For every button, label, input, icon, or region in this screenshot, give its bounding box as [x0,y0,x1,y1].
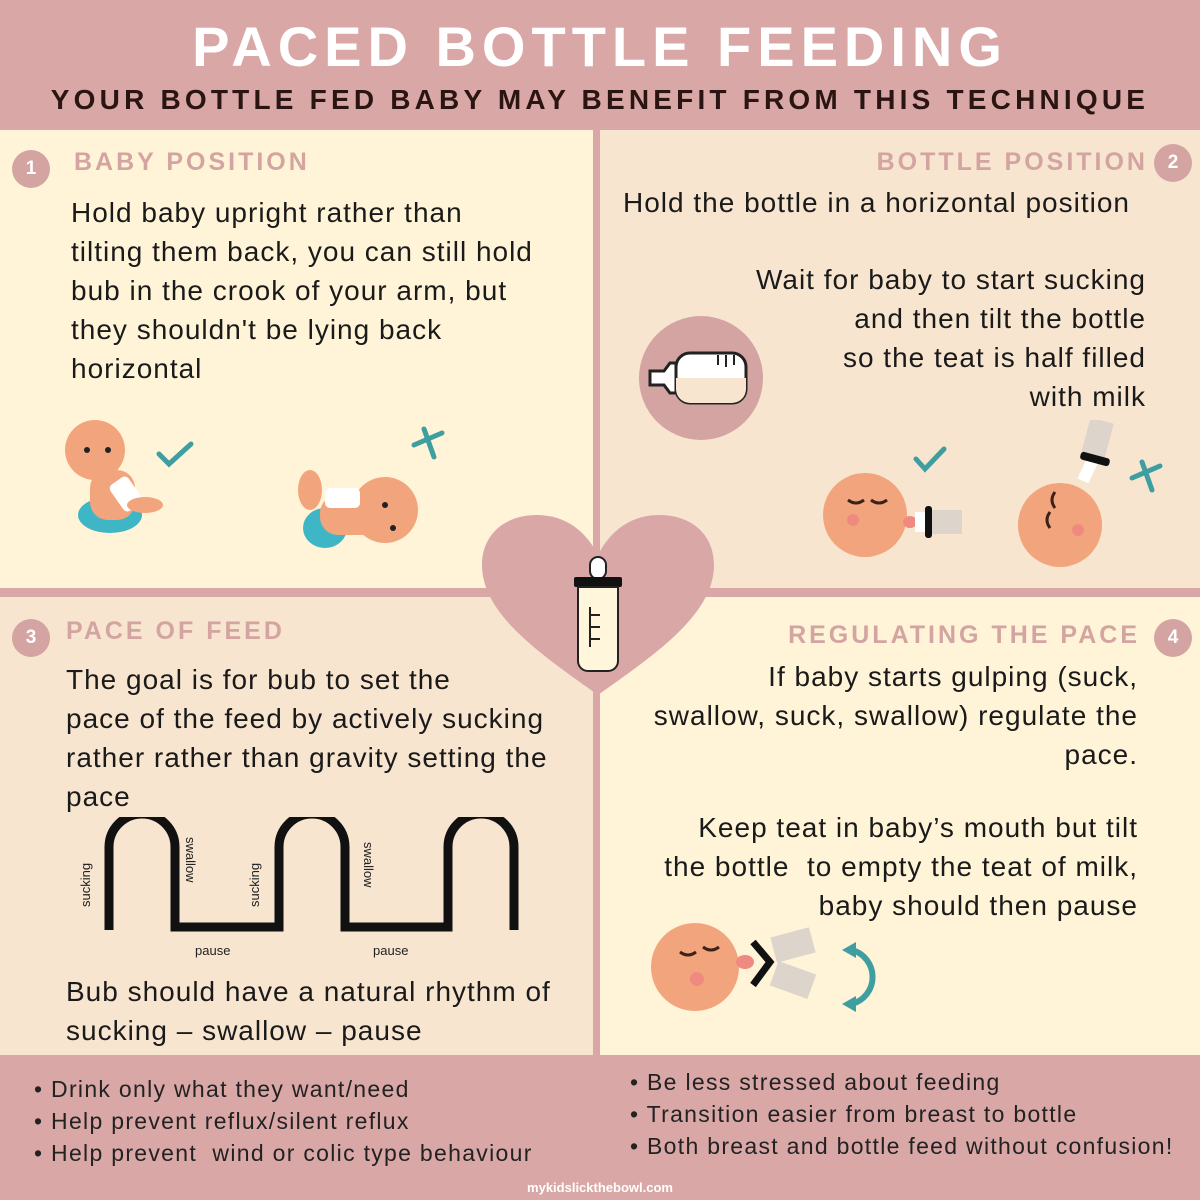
heading: BABY POSITION [74,148,310,176]
text 1: Hold the bottle in a horizontal position [623,187,1130,218]
text 2: the bottle to empty the teat of milk, [664,851,1138,882]
heading: BOTTLE POSITION [877,148,1148,176]
icon: check [156,442,194,468]
number 1 [12,150,50,188]
bullets: left: • Help prevent wind or colic type behaviour [34,1140,533,1166]
icon: check [914,446,946,473]
bullets: right: • Be less stressed about feeding [630,1069,1001,1095]
text: bub in the crook of your arm, but [71,275,507,306]
panel: baby position [0,130,593,588]
text 2 [756,264,1146,412]
bullets: left [34,1076,533,1166]
chart: rhythm wave: pause [373,943,408,958]
number 2: 2 [1168,152,1178,173]
number 2 [1154,144,1192,182]
text: rhythm [66,976,551,1046]
text 2: and then tilt the bottle [854,303,1146,334]
icon: heart with bottle [482,515,714,694]
heading: PACE OF FEED [66,617,285,645]
chart: rhythm wave: sucking [247,863,262,907]
text 1: pace. [1064,739,1138,770]
bullets: right: • Both breast and bottle feed without confusion! [630,1133,1174,1159]
bullets: right [630,1069,1174,1159]
icon: cross [1130,460,1162,492]
chart: rhythm wave: swallow [183,837,198,883]
icon: upright baby [65,420,163,533]
footer url: mykidslickthebowl.com [527,1180,673,1195]
bullets: left: • Drink only what they want/need [34,1076,410,1102]
text: pace of the feed by actively sucking [66,703,544,734]
bullets: left: • Help prevent reflux/silent reflux [34,1108,410,1134]
text: rhythm: sucking – swallow – pause [66,1015,423,1046]
panel: regulating the pace [600,597,1200,1055]
number 1: 1 [26,158,36,179]
text 2: with milk [1030,381,1146,412]
text: they shouldn't be lying back [71,314,442,345]
header [0,0,1200,130]
heading: REGULATING THE PACE [788,621,1140,649]
number 4 [1154,619,1192,657]
text 1: swallow, suck, swallow) regulate the [654,700,1138,731]
panel: pace of feed [0,597,593,1055]
text 2: Wait for baby to start sucking [756,264,1146,295]
text 2: so the teat is half filled [843,342,1146,373]
text: pace [66,781,131,812]
icon: baby head tilted wrong [1018,420,1114,567]
icon: horizontal bottle in circle [639,316,763,440]
text 2: Keep teat in baby’s mouth but tilt [698,812,1138,843]
icon: lying baby [298,470,418,548]
text 2: baby should then pause [819,890,1138,921]
chart: rhythm wave [78,817,518,958]
text: rather rather than gravity setting the [66,742,548,773]
text: Hold baby upright rather than [71,197,463,228]
number 3: 3 [26,627,36,648]
subtitle: YOUR BOTTLE FED BABY MAY BENEFIT FROM THIS TECHNIQUE [51,84,1149,115]
text 1 [654,661,1138,770]
icon: baby head correct [823,473,962,557]
bullets: right: • Transition easier from breast to bottle [630,1101,1077,1127]
text: horizontal [71,353,202,384]
icon: baby with two bottles [651,923,816,1011]
number 3 [12,619,50,657]
number 4: 4 [1168,627,1178,648]
text 2 [664,812,1138,921]
icon: cross [412,426,444,460]
text: rhythm: Bub should have a natural rhythm of [66,976,551,1007]
icon: rotate arrows [842,942,876,1012]
text [66,664,548,812]
text [71,197,533,384]
text 1: If baby starts gulping (suck, [768,661,1138,692]
chart: rhythm wave: pause [195,943,230,958]
text: The goal is for bub to set the [66,664,451,695]
chart: rhythm wave: swallow [361,842,376,888]
title: PACED BOTTLE FEEDING [192,15,1008,78]
text: tilting them back, you can still hold [71,236,533,267]
chart: rhythm wave: sucking [78,863,93,907]
panel: bottle position [600,130,1200,588]
